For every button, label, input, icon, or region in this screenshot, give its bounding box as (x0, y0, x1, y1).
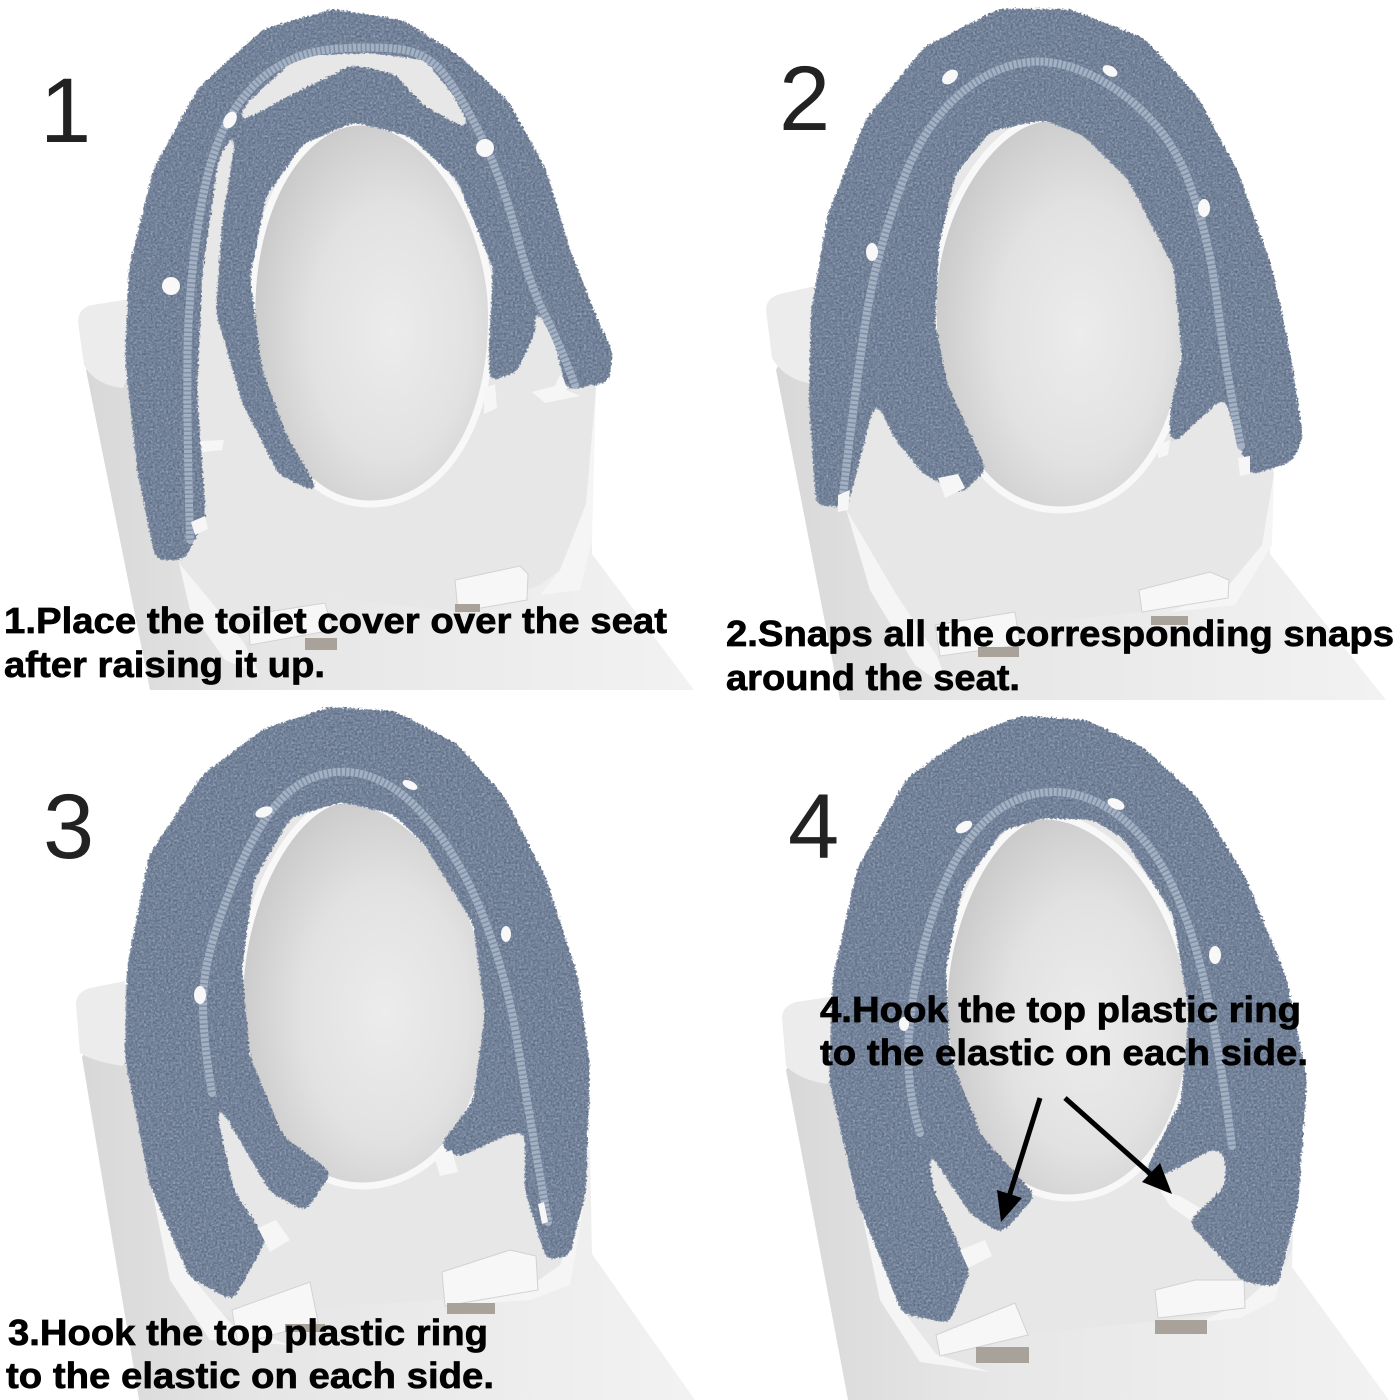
seat lip 2 (846, 473, 1274, 690)
hinge pucks 3 (285, 1303, 495, 1332)
seat lip 4 (859, 1200, 1296, 1372)
step number 3: 3 (43, 776, 94, 878)
arrow right (1065, 1098, 1172, 1194)
step 4 caption: to the elastic on each side. (820, 1032, 1308, 1073)
step 1 caption (4, 600, 667, 685)
step 2 caption (726, 613, 1394, 698)
gray cover 2 (811, 11, 1301, 504)
hinge 2 left (935, 612, 1020, 656)
plastic clips 1 (191, 384, 497, 535)
hinge 2 right (1139, 572, 1229, 612)
step 3 caption: 3.Hook the top plastic ring (8, 1312, 488, 1353)
arrow left (997, 1098, 1040, 1222)
seat 4 (845, 740, 1292, 1354)
toilet body 4 (786, 1000, 1389, 1400)
step 2 caption: 2.Snaps all the corresponding snaps (726, 613, 1394, 654)
plastic clips 3 (258, 1150, 548, 1252)
panel 3: hook the plastic ring (6, 709, 695, 1400)
step 1 caption: 1.Place the toilet cover over the seat (4, 600, 667, 641)
hinge pucks 4 (976, 1320, 1207, 1363)
seat lip 1 (179, 388, 596, 675)
step 3 caption: to the elastic on each side. (6, 1355, 494, 1396)
hinge 3 right (442, 1250, 538, 1306)
lower seat pegs 1 (183, 375, 580, 454)
seat hole 1 (252, 122, 492, 504)
step number 1: 1 (40, 60, 91, 162)
gray cover 4 (831, 718, 1305, 1321)
cover snaps 2 (866, 63, 1210, 261)
panel 4: hook ring, with arrows (782, 718, 1389, 1400)
seat hole 4 (944, 816, 1191, 1198)
toilet tank 2 (766, 286, 815, 384)
step 1 caption: after raising it up. (4, 644, 325, 685)
step number 2: 2 (779, 48, 830, 150)
elastic edge 3 (203, 772, 548, 1222)
hinge 4 right (1155, 1280, 1245, 1318)
cover snaps 3 (194, 778, 511, 1004)
toilet body 2 (776, 290, 1386, 700)
step 4 caption: 4.Hook the top plastic ring (820, 989, 1301, 1030)
plastic clips 4 (960, 1190, 1200, 1268)
cover snaps 1 (162, 109, 494, 295)
toilet tank 4 (782, 997, 830, 1084)
cover snaps 4 (899, 796, 1221, 1031)
toilet tank 3 (76, 981, 125, 1066)
toilet body 1 (86, 300, 694, 690)
gray cover 1 (127, 11, 610, 558)
plastic clips 2 (838, 440, 1250, 512)
seat 2 (835, 60, 1274, 656)
hinge pucks 1 (305, 604, 480, 650)
step number 4: 4 (788, 776, 839, 878)
step 3 caption (6, 1312, 494, 1396)
elastic edge 1 (187, 48, 575, 540)
hinge 1 left (248, 603, 333, 645)
seat lip 3 (150, 1180, 584, 1345)
elastic edge 4 (908, 792, 1232, 1146)
hinge 4 left (936, 1303, 1028, 1356)
step 2 caption: around the seat. (726, 657, 1020, 698)
hinge 3 left (232, 1282, 318, 1345)
seat hole 2 (933, 118, 1186, 510)
seat hole 3 (240, 800, 490, 1186)
gray cover 3 (127, 709, 588, 1298)
panel 2: snap all snaps around the seat (726, 11, 1394, 700)
panel 1: place the cover over the seat (4, 11, 694, 690)
step 4 caption (820, 989, 1308, 1073)
seat 3 (150, 740, 584, 1320)
hinge pucks 2 (978, 616, 1188, 657)
elastic edge 2 (842, 62, 1241, 504)
toilet tank 1 (78, 299, 130, 388)
hinge 1 right (455, 566, 528, 612)
seat 1 (150, 40, 596, 643)
toilet body 3 (82, 985, 695, 1400)
